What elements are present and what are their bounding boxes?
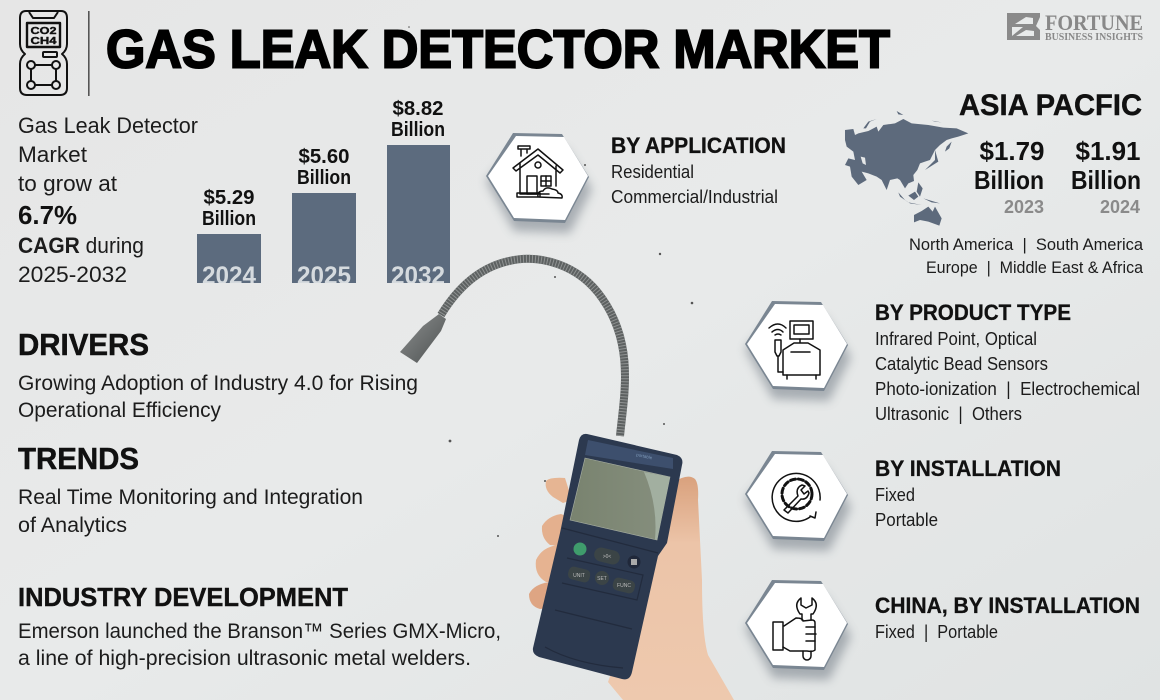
drivers: Growing Adoption of Industry 4.0 for Rising xyxy=(18,372,418,395)
device: handheld gas leak detector xyxy=(533,434,682,679)
by product type xyxy=(875,300,1140,424)
gooseneck probe xyxy=(400,259,625,436)
asia pacific values: Billion xyxy=(1071,165,1141,195)
industry development: a line of high-precision ultrasonic metal welders. xyxy=(18,647,471,670)
by installation: Fixed xyxy=(875,485,915,505)
industry development xyxy=(18,582,501,670)
logo: Fortune Business Insights: BUSINESS INSIGHTS xyxy=(1045,32,1143,43)
header icon: gas detector: CH4 xyxy=(30,36,57,47)
header icon: gas detector xyxy=(20,11,67,95)
by product type: Ultrasonic | Others xyxy=(875,404,1022,424)
text block: CAGR: Gas Leak Detector xyxy=(18,113,198,138)
drivers: Operational Efficiency xyxy=(18,399,221,422)
asia pacific values: Billion xyxy=(974,165,1044,195)
device screen xyxy=(570,458,670,540)
hand behind device xyxy=(529,477,734,700)
text block: CAGR: CAGR during xyxy=(18,233,144,258)
asia pacific map xyxy=(845,111,968,226)
by installation: BY INSTALLATION xyxy=(875,456,1061,481)
drivers xyxy=(18,327,418,422)
asia pacific values: 2023 xyxy=(1004,197,1044,217)
by application xyxy=(611,133,786,207)
bar chart: $5.60 xyxy=(298,146,350,168)
by application: Residential xyxy=(611,162,694,182)
trends: TRENDS xyxy=(18,441,139,476)
asia pacific heading: ASIA PACFIC xyxy=(959,89,1142,122)
background specks xyxy=(408,26,693,537)
bar chart: Billion xyxy=(202,208,256,230)
by application: BY APPLICATION xyxy=(611,133,786,158)
drivers: DRIVERS xyxy=(18,327,149,362)
device buttons: >0< xyxy=(603,554,611,560)
asia pacific values: $1.91 xyxy=(1076,136,1140,166)
hexagon icon: house xyxy=(486,133,592,233)
screen glare xyxy=(644,472,670,540)
hexagon icon: product xyxy=(745,301,851,401)
text block: CAGR: Market xyxy=(18,142,87,167)
china by installation xyxy=(875,593,1140,642)
device buttons: SET xyxy=(597,576,607,582)
bar chart: 2025 xyxy=(297,262,351,290)
hexagon icon: hand with wrench xyxy=(745,580,851,680)
device nameplate xyxy=(585,440,673,469)
asia pacific values: 2024 xyxy=(1100,197,1140,217)
by installation: Portable xyxy=(875,510,938,530)
device buttons xyxy=(567,542,640,594)
device panel lines xyxy=(545,528,658,668)
bar chart: 2024 xyxy=(202,262,256,290)
text block: CAGR xyxy=(18,113,198,287)
text block: CAGR: to grow at xyxy=(18,171,117,196)
logo: Fortune Business Insights: FORTUNE xyxy=(1045,10,1143,35)
header divider xyxy=(88,11,90,96)
header icon: gas detector: CO2 xyxy=(30,26,57,37)
trends: of Analytics xyxy=(18,514,127,537)
device nameplate: portable xyxy=(636,452,653,460)
bar chart: Billion xyxy=(297,167,351,189)
title: GAS LEAK DETECTOR MARKET xyxy=(106,20,890,80)
china by installation: CHINA, BY INSTALLATION xyxy=(875,593,1140,618)
text block: CAGR: 6.7% xyxy=(18,200,77,230)
by product type: Photo-ionization | Electrochemical xyxy=(875,379,1140,399)
hexagon icon: installation xyxy=(745,451,851,551)
bar chart xyxy=(197,98,450,290)
device buttons: UNIT xyxy=(573,573,585,579)
by application: Commercial/Industrial xyxy=(611,187,778,207)
industry development: INDUSTRY DEVELOPMENT xyxy=(18,582,348,612)
by installation xyxy=(875,456,1061,530)
trends xyxy=(18,441,363,537)
asia pacific values: $1.79 xyxy=(980,136,1044,166)
trends: Real Time Monitoring and Integration xyxy=(18,486,363,509)
text block: CAGR: 2025-2032 xyxy=(18,262,127,287)
bar chart: Billion xyxy=(391,119,445,141)
by product type: BY PRODUCT TYPE xyxy=(875,300,1071,325)
by product type: Catalytic Bead Sensors xyxy=(875,354,1048,374)
logo: Fortune Business Insights xyxy=(1007,10,1143,43)
china by installation: Fixed | Portable xyxy=(875,622,998,642)
device buttons: FUNC xyxy=(617,583,631,589)
industry development: Emerson launched the Branson™ Series GMX-Micro, xyxy=(18,620,501,643)
by product type: Infrared Point, Optical xyxy=(875,329,1037,349)
bar chart: $8.82 xyxy=(392,98,444,120)
asia pacific values xyxy=(974,136,1141,217)
bar chart: 2032 xyxy=(391,262,445,290)
other regions: Europe | Middle East & Africa xyxy=(926,258,1144,277)
other regions xyxy=(909,235,1144,277)
bar chart: $5.29 xyxy=(204,187,254,209)
other regions: North America | South America xyxy=(909,235,1144,254)
